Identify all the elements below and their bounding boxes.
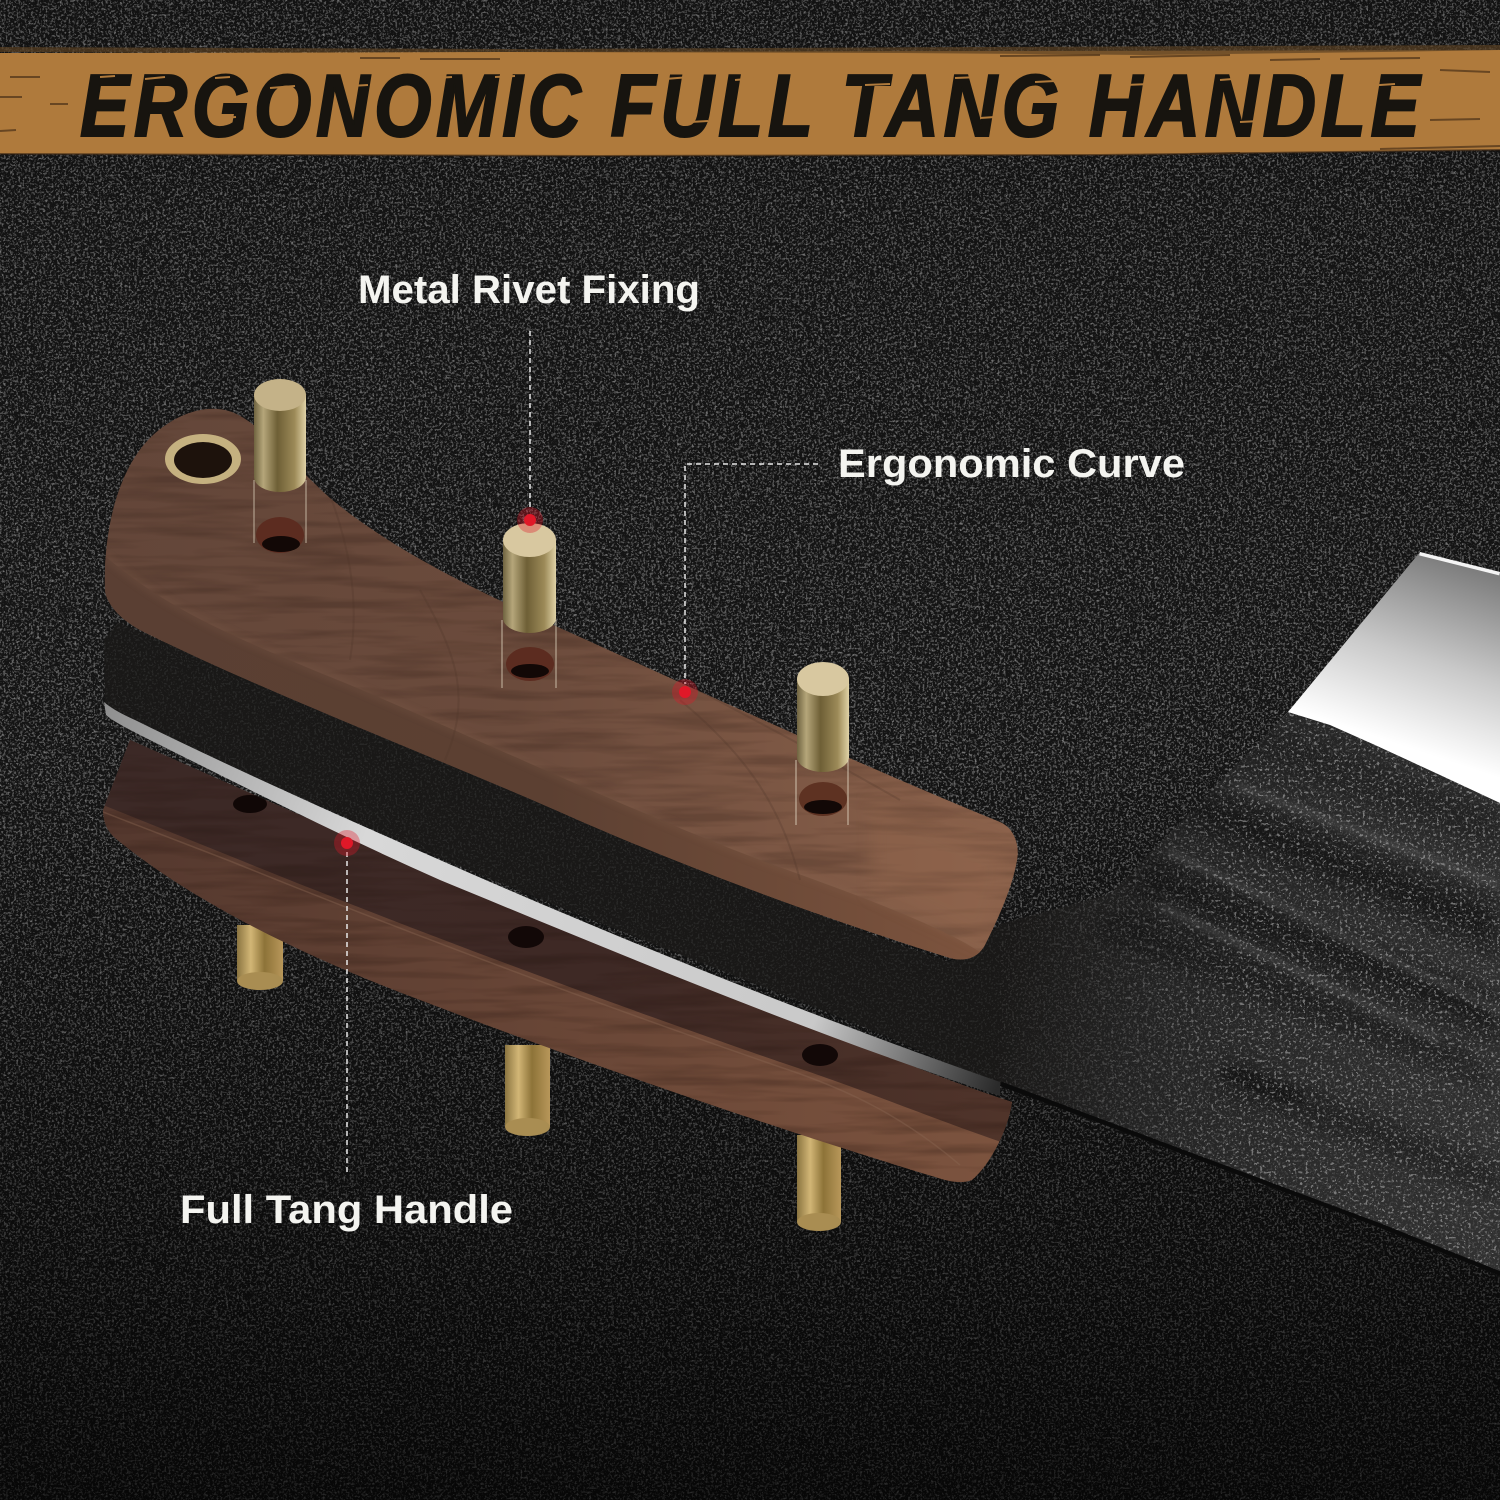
hammered dark blade section <box>1000 700 1500 1280</box>
rivet hole 3 <box>799 782 847 816</box>
blade <box>1000 540 1500 1280</box>
heading: ERGONOMIC FULL TANG HANDLE <box>80 57 1422 155</box>
callout: Ergonomic Curve: Ergonomic Curve <box>838 442 1185 486</box>
callout: Metal Rivet Fixing: Metal Rivet Fixing <box>358 268 700 312</box>
silver spine edge <box>104 702 1000 1096</box>
upper rivet 3 <box>796 662 849 825</box>
rivet hole 2 <box>506 647 554 681</box>
upper handle scale <box>100 400 1030 970</box>
lower rivets behind the handle <box>237 925 841 1231</box>
upper rivet 2 <box>502 523 556 688</box>
title banner: worn wooden strip <box>0 45 1500 156</box>
chrome polished blade section <box>1280 552 1500 803</box>
callout: Full Tang Handle: Full Tang Handle <box>180 1188 513 1232</box>
rivet hole 1 <box>256 517 304 553</box>
lower handle scale <box>100 740 1020 1190</box>
tang black band <box>104 622 1000 1082</box>
screw holes in lower scale <box>233 795 838 1066</box>
callout: Ergonomic Curve <box>672 442 1185 705</box>
upper rivet 1 <box>254 379 306 543</box>
tang: black steel core between handle scales <box>100 610 1040 1190</box>
callout: Metal Rivet Fixing <box>358 268 700 533</box>
callout: Full Tang Handle <box>180 830 513 1232</box>
brass lanyard ring <box>165 434 241 484</box>
